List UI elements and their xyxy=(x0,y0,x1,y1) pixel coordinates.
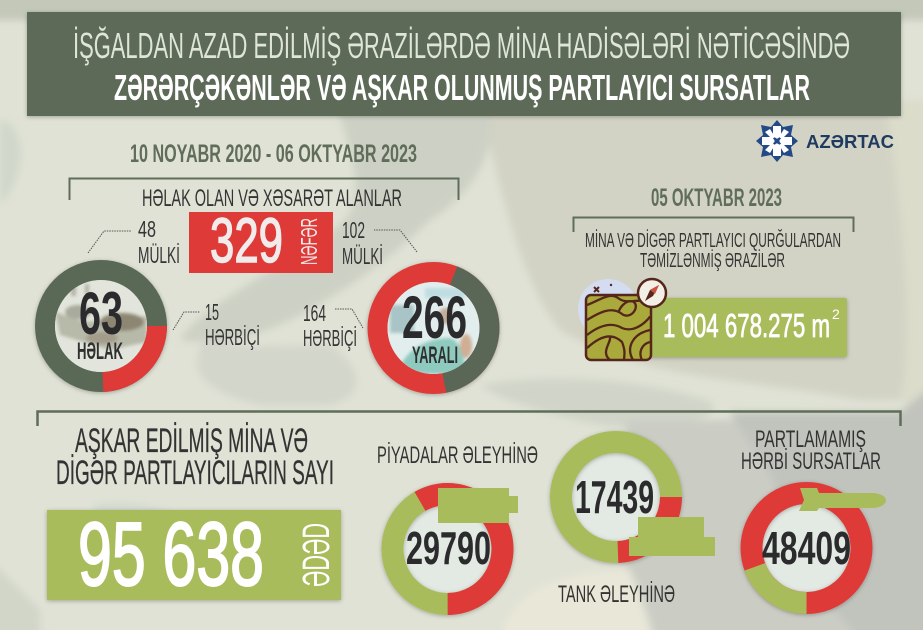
donut: wounded 266 xyxy=(365,260,502,398)
number 95 638: 95 638 xyxy=(78,505,264,605)
label: anti-personnel: PİYADALAR ƏLEYHİNƏ xyxy=(377,442,538,469)
number 17439: 17439 xyxy=(575,471,654,523)
text: cleared areas description: TƏMİZLƏNMİŞ ƏRAZİLƏR xyxy=(640,249,785,272)
cleared area value box xyxy=(645,298,847,357)
number 329: 329 xyxy=(210,206,283,276)
caption: YARALI: YARALI xyxy=(412,342,458,369)
label: 102 civilians: MÜLKİ xyxy=(342,243,383,269)
label: unexploded ordnance: PARTLAMAMIŞ xyxy=(755,426,866,453)
icon: topographic map with compass xyxy=(578,279,666,360)
value: 1 004 678.275 m xyxy=(663,307,830,344)
silhouette: mine xyxy=(438,488,518,523)
label: 15 military: HƏRBİÇİ xyxy=(205,324,260,350)
logo wordmark: AZƏRTAC xyxy=(806,132,894,152)
label: 102 civilians: 102 xyxy=(342,217,365,243)
number 48409: 48409 xyxy=(762,522,851,574)
donut: unexploded ordnance 48409 xyxy=(752,488,886,603)
donut: killed 63 xyxy=(45,270,157,382)
superscript: 2 xyxy=(832,306,840,322)
bracket: explosives section xyxy=(38,412,900,426)
bracket: cleared areas xyxy=(574,218,854,232)
logo: AZƏRTAC xyxy=(756,120,894,162)
title banner xyxy=(27,12,901,116)
label: 48 civilians: MÜLKİ xyxy=(138,242,180,268)
donut: anti-tank 17439 xyxy=(561,442,715,556)
caption: HƏLAK: HƏLAK xyxy=(77,338,123,365)
photo: wounded xyxy=(387,282,480,374)
label: 164 military: HƏRBİÇİ xyxy=(303,325,357,351)
total explosives box xyxy=(47,505,341,605)
bracket: casualties xyxy=(70,178,458,200)
silhouette: shell xyxy=(799,488,886,511)
label: unexploded ordnance xyxy=(741,426,881,475)
label: 48 civilians xyxy=(138,216,180,268)
number 29790: 29790 xyxy=(406,522,491,574)
unit: NƏFƏR: NƏFƏR xyxy=(296,218,322,265)
label: 164 military xyxy=(303,300,357,351)
leader lines xyxy=(88,230,417,330)
heading: explosives count xyxy=(56,422,334,492)
label: anti-tank: TANK ƏLEYHİNƏ xyxy=(558,581,675,608)
logo emblem xyxy=(756,120,798,162)
total casualties box xyxy=(189,206,333,276)
number 63: 63 xyxy=(79,280,123,347)
label: 15 military xyxy=(205,299,260,350)
heading: explosives count: DİGƏR PARTLAYICILARIN SAYI xyxy=(56,454,334,492)
unit: ƏDƏD: ƏDƏD xyxy=(296,523,338,587)
label: 164 military: 164 xyxy=(303,300,326,326)
donut: anti-personnel 29790 xyxy=(372,474,523,624)
silhouette: tank mine xyxy=(629,517,715,556)
heading: casualties: HƏLAK OLAN VƏ XƏSARƏT ALANLAR xyxy=(142,185,402,212)
photo: killed xyxy=(55,280,147,372)
label: 48 civilians: 48 xyxy=(138,216,156,242)
label: 102 civilians xyxy=(342,217,383,269)
number 266: 266 xyxy=(402,284,467,351)
heading: explosives count: AŞKAR EDİLMİŞ MİNA VƏ xyxy=(75,422,308,460)
text: cleared areas description xyxy=(585,229,841,272)
label: 15 military: 15 xyxy=(205,299,219,325)
date heading: casualties period: 10 NOYABR 2020 - 06 OKTYABR 2023 xyxy=(130,140,417,168)
date heading: cleared areas: 05 OKTYABR 2023 xyxy=(651,184,782,212)
